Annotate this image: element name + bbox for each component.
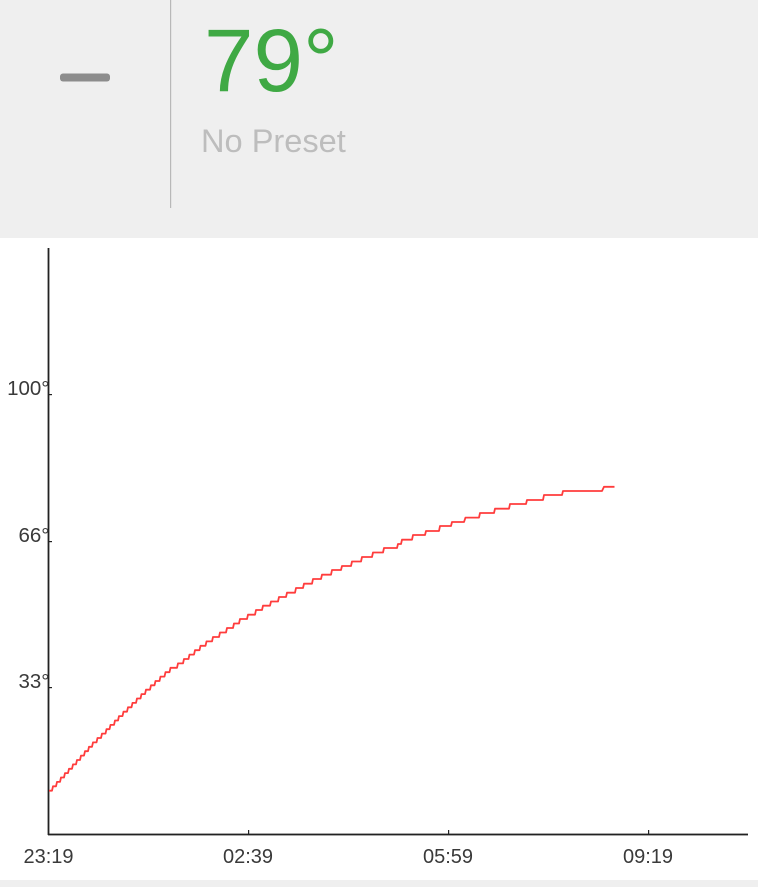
current temperature: 79° — [204, 10, 339, 110]
line chart: temperature over time — [7, 248, 748, 868]
x axis labels: 23:19 — [23, 846, 74, 868]
y axis labels: 33° — [18, 670, 50, 693]
x axis labels: 09:19 — [623, 846, 673, 868]
x axis labels — [23, 846, 673, 868]
temperature line — [49, 487, 614, 791]
panel: status header — [0, 0, 758, 238]
y axis labels — [7, 377, 50, 693]
x axis — [48, 830, 748, 835]
x axis labels: 02:39 — [223, 846, 273, 868]
y axis — [48, 248, 52, 835]
x axis labels: 05:59 — [423, 846, 473, 868]
y axis labels: 100° — [7, 377, 50, 400]
footer strip — [0, 880, 758, 887]
icon: minus dash — [60, 74, 110, 82]
y axis labels: 66° — [18, 524, 50, 547]
preset label: No Preset — [201, 122, 346, 159]
